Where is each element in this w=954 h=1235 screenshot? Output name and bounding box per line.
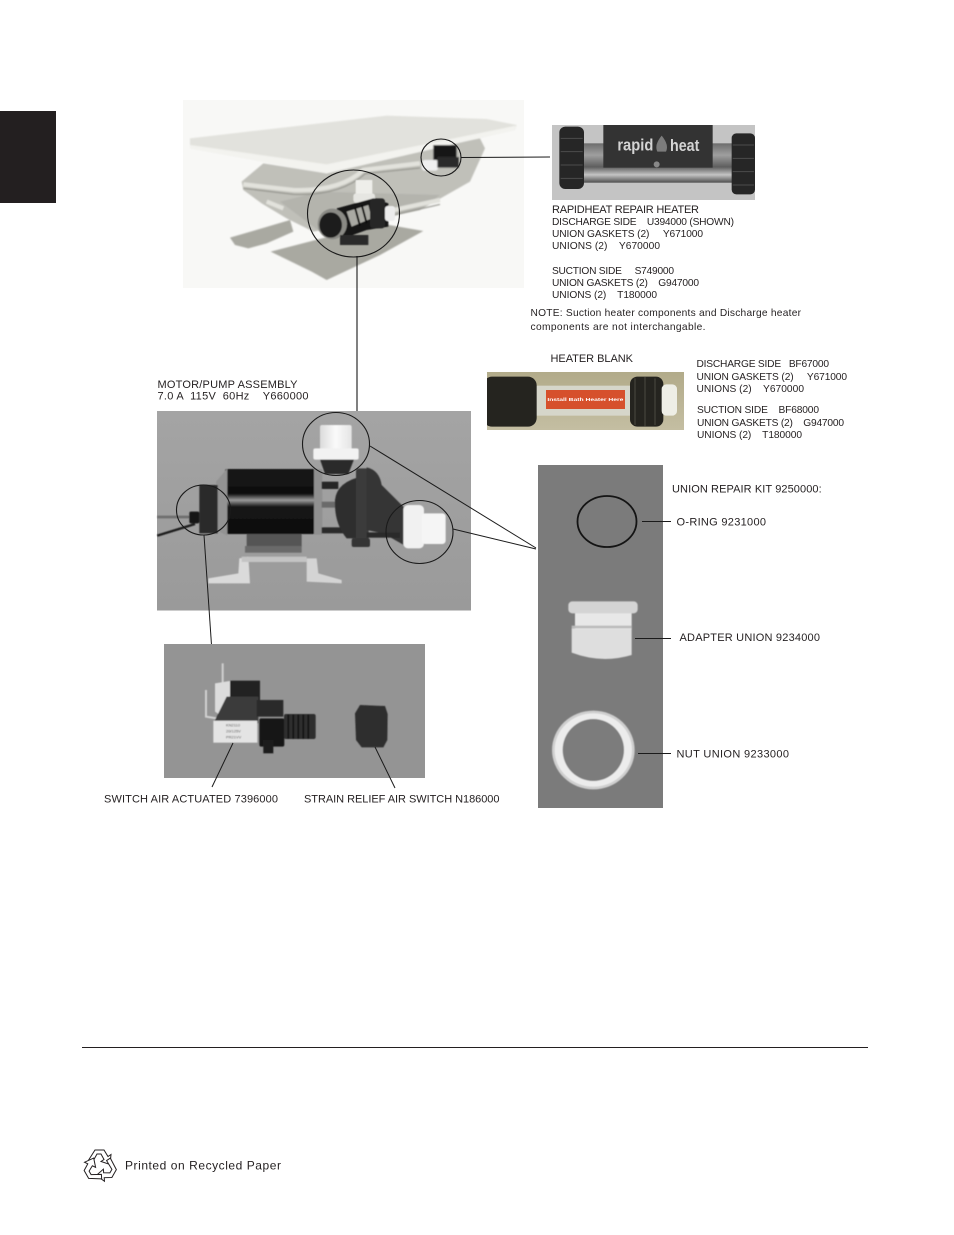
- callout circles on motor photo: [176, 412, 453, 564]
- text: printed on recycled paper: Printed on Recycled Paper: [125, 1158, 281, 1172]
- photo: motor and pump: [157, 411, 471, 610]
- switch label text: [226, 723, 242, 740]
- icon: flame on heater label: [656, 136, 667, 152]
- text block: rapidheat part numbers: SUCTION SIDE S749000: [552, 266, 674, 277]
- shaft: [322, 502, 338, 508]
- labels: union repair kit: NUT UNION 9233000: [676, 749, 789, 761]
- photo: union repair kit parts: [538, 465, 663, 808]
- o-ring: [578, 496, 636, 547]
- footer rule: [82, 1047, 868, 1048]
- pump housing: [335, 476, 363, 538]
- heater brand text: heat: [670, 136, 700, 155]
- text block: rapidheat part numbers: RAPIDHEAT REPAIR HEATER: [552, 204, 699, 216]
- leader lines: union parts to labels: [635, 522, 671, 754]
- note text: components are not interchangable.: [530, 322, 706, 333]
- label text on heater blank: Install Bath Heater Here: [547, 397, 624, 402]
- text block: heater blank part numbers: UNIONS (2) Y670000: [696, 384, 804, 395]
- tub feet: [230, 220, 423, 280]
- right outlet: [403, 505, 424, 548]
- pump on tub: [318, 180, 395, 245]
- leader line: pump circle to motor photo: [356, 256, 358, 411]
- text block: rapidheat part numbers: UNIONS (2) Y670000: [552, 241, 660, 252]
- labels: switch and strain relief: SWITCH AIR ACTUATED 7396000: [104, 794, 278, 806]
- photo: air switch and strain relief: [164, 644, 425, 778]
- text block: rapidheat part numbers: UNIONS (2) T180000: [552, 290, 657, 301]
- switch label text: PR21VV: [226, 735, 242, 740]
- text block: rapidheat part numbers: UNION GASKETS (2) G947000: [552, 278, 699, 289]
- adapter union: [568, 601, 638, 659]
- callout circles on tub photo: [308, 139, 461, 257]
- nut union: [552, 711, 635, 789]
- photo: bathtub with pump and heater: [183, 100, 524, 288]
- labels: switch and strain relief: [104, 794, 500, 806]
- icon: recycling arrows: [81, 1150, 120, 1184]
- cables: [157, 513, 192, 521]
- tub rim: [190, 116, 517, 173]
- text block: heater blank part numbers: UNION GASKETS (2) G947000: [697, 418, 844, 429]
- heading: motor/pump assembly: [158, 379, 308, 402]
- labels: union repair kit: [672, 484, 822, 761]
- labels: union repair kit: ADAPTER UNION 9234000: [680, 632, 820, 644]
- heading: motor/pump assembly: MOTOR/PUMP ASSEMBLY: [158, 379, 298, 391]
- text block: heater blank part numbers: DISCHARGE SIDE BF67000: [696, 359, 829, 370]
- black section tab: [0, 111, 56, 203]
- strain relief nut: [355, 705, 388, 747]
- text block: heater blank part numbers: UNIONS (2) T180000: [697, 430, 802, 441]
- leader lines: switch parts to labels: [212, 743, 395, 788]
- leader line: motor box to switch photo: [204, 535, 212, 645]
- text block: rapidheat part numbers: UNION GASKETS (2) Y671000: [552, 229, 703, 240]
- note text: NOTE: Suction heater components and Discharge heater: [530, 308, 802, 319]
- tub underside shell: [242, 138, 485, 232]
- photo: rapidheat repair heater: [552, 125, 755, 200]
- text block: rapidheat part numbers: [552, 204, 734, 301]
- text block: heater blank part numbers: SUCTION SIDE BF68000: [697, 405, 819, 416]
- motor body: [225, 469, 320, 534]
- switch label text: KN2110: [226, 723, 241, 728]
- text block: heater blank part numbers: UNION GASKETS (2) Y671000: [696, 372, 847, 383]
- top outlet: [320, 459, 354, 474]
- leader lines: motor outlets to union kit: [370, 446, 536, 549]
- labels: union repair kit: O-RING 9231000: [676, 517, 766, 529]
- text block: rapidheat part numbers: DISCHARGE SIDE U394000 (SHOWN): [552, 217, 734, 228]
- photo: heater blank: [483, 372, 684, 430]
- heading: heater blank: HEATER BLANK: [550, 353, 634, 365]
- labels: switch and strain relief: STRAIN RELIEF AIR SWITCH N186000: [304, 794, 500, 806]
- heater brand text: [617, 135, 700, 155]
- note text: [530, 308, 802, 333]
- heading: motor/pump assembly: 7.0 A 115V 60Hz Y660000: [158, 390, 308, 402]
- bracket and feet: [208, 557, 250, 583]
- leader line: heater circle to rapidheat photo: [461, 156, 550, 158]
- switch label text: 20/125V: [226, 728, 241, 733]
- labels: union repair kit: UNION REPAIR KIT 9250000:: [672, 484, 822, 496]
- heater on tub: [433, 145, 457, 160]
- heater brand text: rapid: [617, 135, 653, 154]
- text block: heater blank part numbers: [696, 359, 847, 441]
